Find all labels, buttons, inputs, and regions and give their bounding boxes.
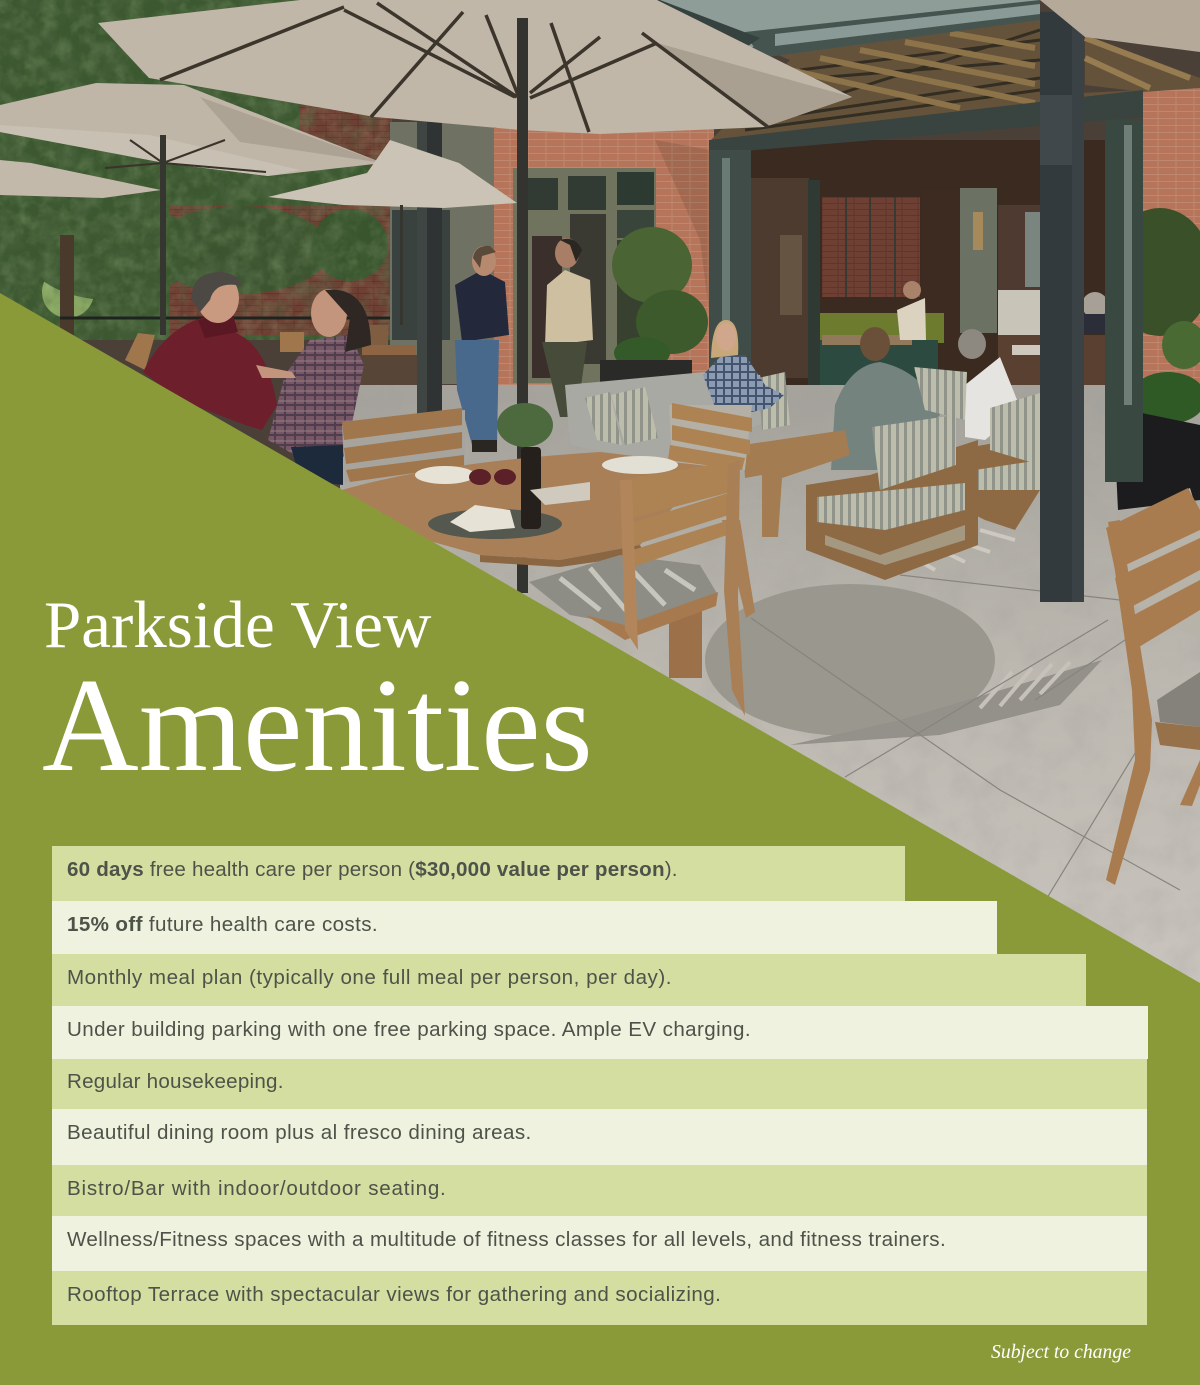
row: monthly meal plan: Monthly meal plan (typically one full meal per person, per day). (67, 966, 672, 989)
interior room (710, 140, 1150, 415)
foliage and brick garden wall (0, 0, 400, 340)
planters and shrubs (600, 208, 1200, 510)
dining table with tableware (342, 403, 752, 567)
windows and doors (513, 168, 656, 383)
dining chair in foreground (529, 460, 755, 716)
green diagonal overlay (0, 293, 1200, 1385)
people: couple at left (143, 272, 371, 485)
row: parking: Under building parking with one free parking space. Ample EV charging. (67, 1018, 751, 1041)
row: dining room: Beautiful dining room plus al fresco dining areas. (67, 1121, 532, 1144)
back table and chairs behind couple (125, 325, 417, 395)
row: 60 days free health care: 60 days free health care per person ($30,000 value per person). (67, 858, 678, 881)
row: housekeeping: Regular housekeeping. (67, 1070, 284, 1093)
row: housekeeping (52, 1059, 1147, 1109)
row: rooftop terrace (52, 1271, 1147, 1325)
photo: outdoor dining terrace with umbrellas (0, 0, 1200, 983)
row: 15% off (52, 901, 997, 954)
centre brick building (494, 128, 714, 388)
row: wellness (52, 1216, 1147, 1271)
terrace floor (340, 385, 1200, 1005)
row: monthly meal plan (52, 954, 1086, 1006)
right brick wall (1143, 85, 1200, 385)
pillars and frames (417, 12, 1143, 602)
row: dining room (52, 1109, 1147, 1165)
footnote: Subject to change (991, 1341, 1131, 1363)
pergola roof (640, 0, 1200, 154)
row: bistro (52, 1165, 1147, 1216)
row: 15% off: 15% off future health care costs. (67, 913, 378, 936)
row: 60 days free health care (52, 846, 905, 901)
sofa with pillows (565, 372, 790, 458)
people: two men standing (455, 238, 593, 452)
row: rooftop terrace: Rooftop Terrace with spectacular views for gathering and socializing. (67, 1283, 721, 1306)
lounge chairs and coffee table (743, 367, 1040, 580)
title: Amenities: Amenities (42, 651, 593, 799)
amenities list (52, 846, 1148, 1325)
row: parking (52, 1006, 1148, 1059)
dining chair at right edge (1105, 488, 1200, 885)
olive building section (390, 122, 494, 384)
umbrellas (0, 0, 1200, 593)
background base (0, 0, 1200, 1000)
row: bistro: Bistro/Bar with indoor/outdoor seating. (67, 1177, 447, 1200)
dining chair at back (342, 408, 465, 482)
title: Parkside View: Parkside View (44, 588, 431, 662)
people: seated guests (703, 281, 1021, 545)
row: wellness: Wellness/Fitness spaces with a multitude of fitness classes for all levels, and fitness trainers. (67, 1228, 946, 1251)
